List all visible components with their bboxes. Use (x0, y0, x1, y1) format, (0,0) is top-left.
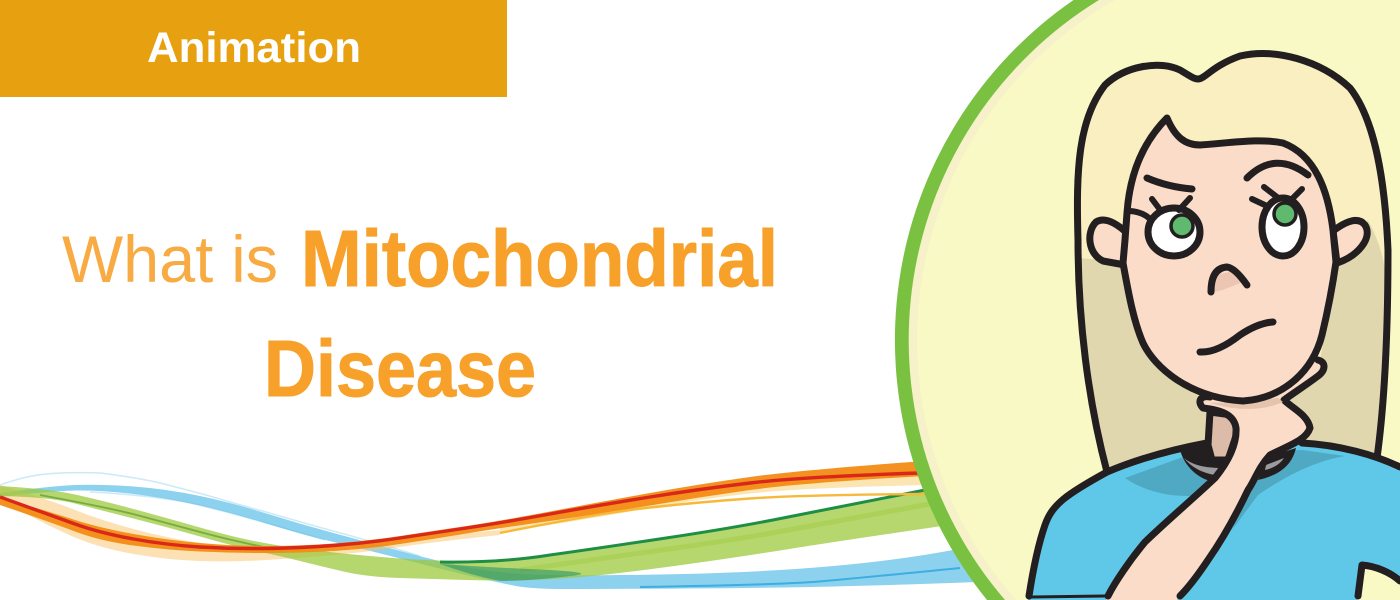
circle portrait background (895, 0, 1400, 600)
nose (1211, 267, 1247, 292)
character illustration (1028, 54, 1400, 600)
face (1123, 118, 1336, 401)
title: Mitochondrial (301, 214, 778, 303)
ribbon: green (0, 486, 942, 580)
chin shadow (1210, 398, 1283, 409)
title (62, 214, 778, 413)
hair (1077, 54, 1388, 472)
ribbon: pale blue strands (0, 473, 420, 556)
ribbon: orange (0, 461, 925, 553)
ribbon: thin yellow strand (500, 494, 925, 533)
ribbon: blue (0, 485, 977, 589)
ribbon: red (0, 473, 920, 549)
left eye (1148, 208, 1200, 256)
banner: Animation: Animation (147, 24, 361, 72)
collar (1180, 442, 1296, 482)
ribbon: blue dark line (640, 568, 960, 587)
ribbon: green inner line (40, 495, 283, 551)
mouth (1200, 322, 1273, 352)
title: Disease (264, 324, 536, 413)
ribbon: dark green edge (440, 490, 925, 562)
banner: Animation (0, 0, 507, 97)
ribbon: green-blue overlap (440, 564, 581, 581)
neck (1208, 412, 1238, 460)
decorative ribbons (0, 461, 977, 589)
shirt (1028, 443, 1400, 600)
arm and hand (1106, 360, 1324, 600)
ribbon: pale yellow edge (500, 470, 925, 533)
right eye (1262, 198, 1304, 256)
title: What is (62, 222, 278, 296)
ears (1090, 220, 1367, 265)
eyebrows and lashes (1130, 163, 1308, 219)
ribbon: green mid band (520, 503, 935, 570)
ribbon: pale orange (0, 485, 500, 561)
